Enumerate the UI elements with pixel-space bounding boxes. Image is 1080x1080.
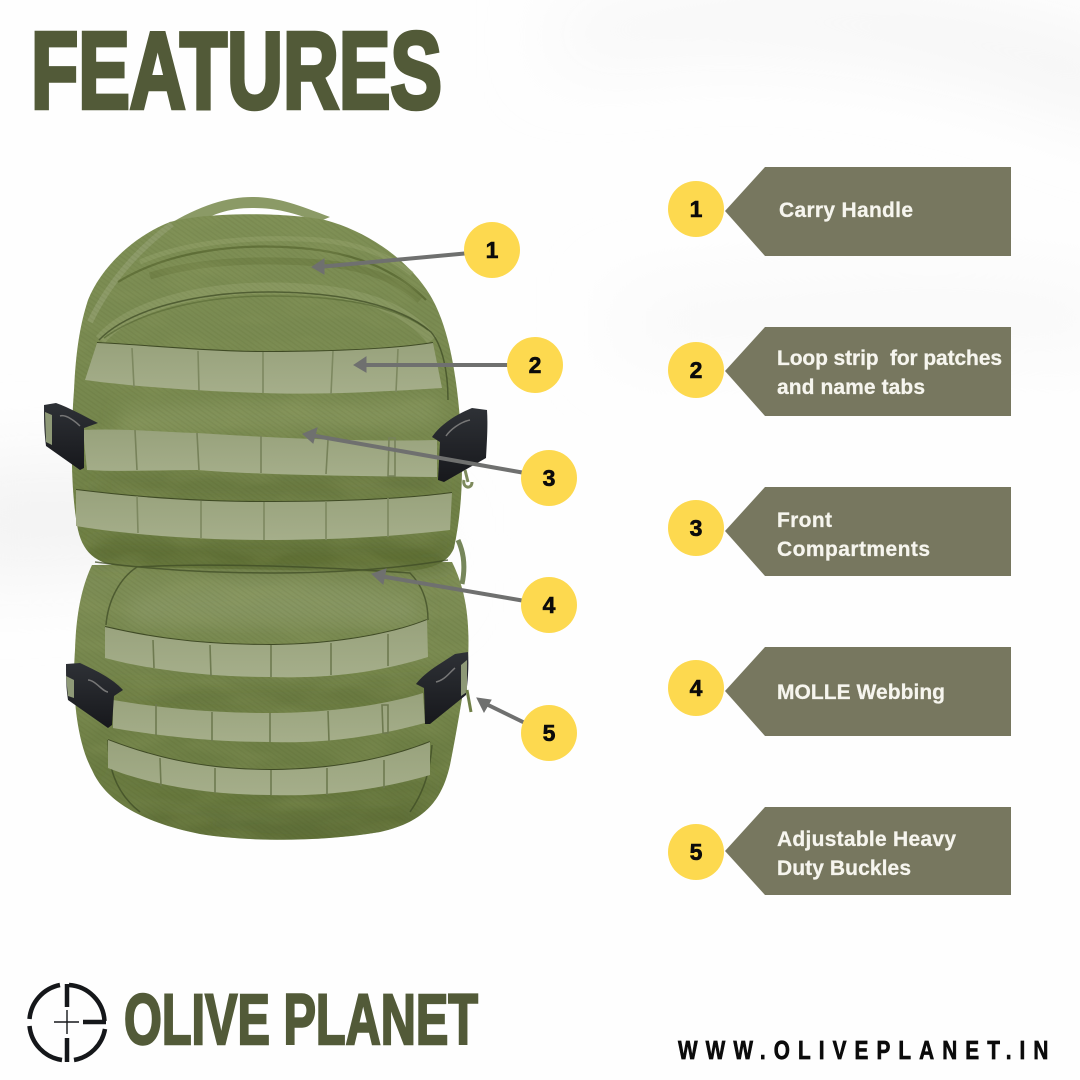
brand name: OLIVE PLANET bbox=[124, 981, 478, 1060]
feature 5: adjustable buckles: Adjustable Heavy bbox=[777, 828, 956, 851]
feature 3: front compartments: 3 bbox=[690, 515, 702, 541]
feature 5: adjustable buckles: 5 bbox=[690, 839, 703, 865]
marker 1 bbox=[464, 222, 520, 278]
arrow 1 bbox=[312, 253, 470, 274]
feature 2: loop strip: 2 bbox=[690, 357, 702, 383]
feature 5: adjustable buckles bbox=[668, 807, 1011, 895]
website url: WWW.OLIVEPLANET.IN bbox=[678, 1036, 1048, 1065]
strap: MOLLE webbing middle bbox=[113, 693, 425, 742]
lower compartment bbox=[74, 562, 468, 840]
feature 3: front compartments bbox=[668, 487, 1011, 576]
marker 5 bbox=[521, 705, 577, 761]
buckle: upper left bbox=[44, 403, 98, 470]
carry handle bbox=[166, 197, 330, 228]
marker 3: 3 bbox=[543, 465, 555, 491]
marker 3 bbox=[521, 450, 577, 506]
buckle: lower left bbox=[66, 663, 123, 728]
marker 4: 4 bbox=[543, 592, 556, 618]
arrow 5 bbox=[477, 698, 525, 723]
shoulder webbing bbox=[90, 224, 172, 322]
feature 2: loop strip: Loop strip for patches bbox=[777, 347, 1002, 370]
marker 2 bbox=[507, 337, 563, 393]
marker 5: 5 bbox=[543, 720, 556, 746]
feature 2: loop strip: and name tabs bbox=[777, 376, 925, 399]
marker 4 bbox=[521, 577, 577, 633]
feature 4: molle webbing: MOLLE Webbing bbox=[777, 681, 945, 704]
feature 3: front compartments: Front bbox=[777, 509, 832, 532]
buckle: upper right bbox=[432, 408, 487, 487]
strap: loop strip bbox=[85, 343, 442, 394]
feature 3: front compartments: Compartments bbox=[777, 538, 930, 561]
mottled cloth bbox=[76, 248, 426, 834]
upper compartment bbox=[72, 214, 462, 572]
photo markers bbox=[464, 222, 577, 761]
feature 1: carry handle: 1 bbox=[690, 196, 703, 222]
strap: MOLLE webbing top bbox=[105, 620, 428, 677]
arrow 4 bbox=[372, 569, 525, 601]
marker 2: 2 bbox=[529, 352, 541, 378]
feature list bbox=[668, 167, 1011, 895]
strap: front compartment lower bbox=[76, 490, 452, 540]
logo crosshair icon bbox=[30, 984, 106, 1062]
marker 1: 1 bbox=[486, 237, 499, 263]
side cord bbox=[458, 540, 464, 584]
buckle: lower right bbox=[416, 652, 471, 724]
fabric shading bbox=[75, 214, 466, 840]
feature 2: loop strip bbox=[668, 327, 1011, 416]
top zipper folds bbox=[100, 239, 432, 340]
title: FEATURES bbox=[31, 10, 442, 132]
feature 1: carry handle: Carry Handle bbox=[779, 199, 913, 222]
feature 5: adjustable buckles: Duty Buckles bbox=[777, 857, 911, 880]
feature 4: molle webbing bbox=[668, 647, 1011, 736]
strap: MOLLE webbing bottom bbox=[108, 740, 430, 795]
strap: front compartment upper bbox=[83, 429, 437, 477]
feature 1: carry handle bbox=[668, 167, 1011, 256]
feature 4: molle webbing: 4 bbox=[690, 675, 703, 701]
backpack photo illustration bbox=[44, 197, 487, 850]
arrow 3 bbox=[303, 428, 525, 473]
compartment seams bbox=[95, 292, 448, 812]
pointer arrows bbox=[303, 253, 525, 723]
arrow 2 bbox=[354, 357, 512, 372]
twill weave bbox=[60, 200, 480, 850]
